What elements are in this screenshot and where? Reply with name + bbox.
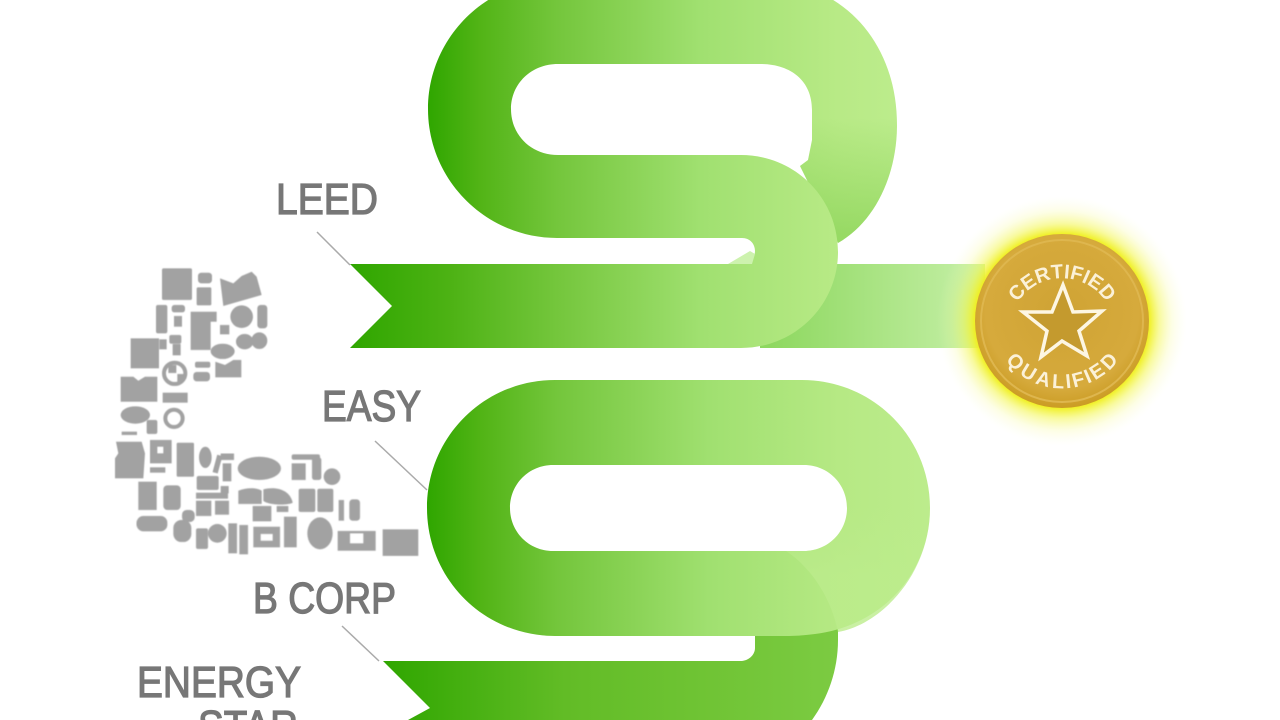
top ribbon: back loop [556,0,897,243]
icon: gold certified badge: QUALIFIED [1008,354,1116,388]
icon: gold certified badge: CERTIFIED [1010,264,1114,300]
label: B CORP [253,574,396,661]
top ribbon: shaded lower back arc [800,118,897,243]
icon cluster: grey product icons [115,268,418,556]
top ribbon: left loop [428,0,558,238]
icon: gold certified badge [946,203,1180,439]
lower ribbon: fold overlap [786,508,930,632]
lower ribbon: closed loop [427,380,930,636]
label: EASY [322,382,427,490]
label: LEED [276,175,378,265]
label: B CORP: B CORP [253,574,396,623]
label: LEED: LEED [276,175,378,224]
label: ENERGY STAR: ENERGY [137,658,301,707]
lower ribbon: bottom strip [383,625,838,720]
top ribbon: front band and arrow tail [350,155,838,348]
top ribbon: tail to badge [760,264,985,348]
top ribbon: small light fold [728,251,755,264]
label: EASY: EASY [322,382,421,431]
